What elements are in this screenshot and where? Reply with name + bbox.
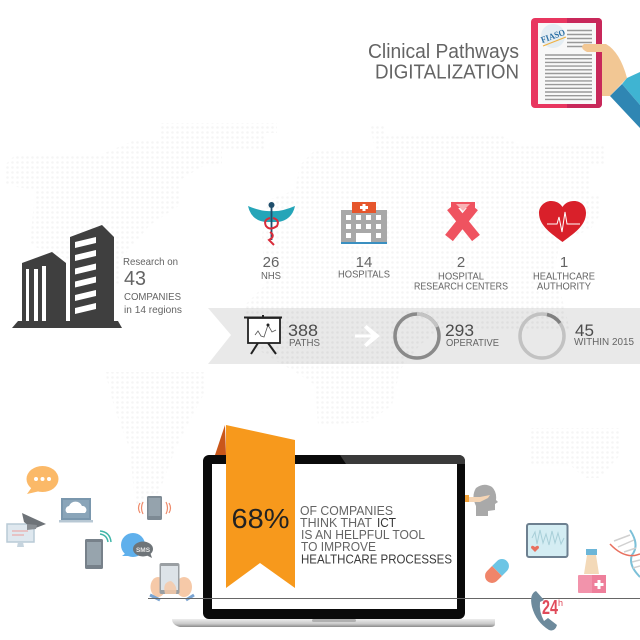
icon: SMS bubbles — [121, 533, 153, 558]
stat: 2 hospital research centers: RESEARCH CENTERS — [414, 282, 508, 292]
text: research on 43 companies: COMPANIES — [124, 291, 181, 303]
text: research on 43 companies — [123, 256, 182, 316]
icon: phone with wifi — [85, 531, 111, 569]
text: research on 43 companies: Research on — [123, 256, 178, 268]
title — [368, 41, 519, 84]
horizontal line — [148, 598, 640, 600]
icon: monitor with graduation cap — [7, 513, 46, 547]
title: Clinical Pathways — [368, 41, 519, 63]
icon: 24h phone: 24 — [542, 597, 559, 619]
stat: 14 hospitals: HOSPITALS — [338, 270, 390, 280]
stat: 2 hospital research centers: HOSPITAL — [438, 272, 484, 282]
text: ICT statement: IS AN HELPFUL TOOL — [301, 527, 425, 542]
icon: hands holding phone — [150, 563, 194, 600]
icon: heart monitor — [527, 524, 568, 557]
45 within 2015 — [574, 322, 634, 348]
293 operative: 293 — [445, 322, 474, 340]
icon: office buildings — [12, 225, 122, 328]
ring: within 2015 — [520, 314, 564, 358]
icon: medical bag with hand — [578, 549, 606, 593]
icon: vibrating phone — [138, 496, 170, 520]
stat: 2 hospital research centers: 2 — [457, 254, 465, 271]
text: ICT statement: OF COMPANIES — [300, 503, 393, 518]
text: ICT statement: HEALTHCARE PROCESSES — [301, 552, 452, 566]
icon: caduceus — [248, 202, 295, 245]
45 within 2015: WITHIN 2015 — [574, 337, 634, 348]
dotted world map background — [5, 123, 620, 505]
388 paths: 388 — [288, 322, 318, 340]
stat: 1 healthcare authority — [533, 254, 595, 292]
text: research on 43 companies: in 14 regions — [124, 304, 182, 316]
icon: SMS bubbles: SMS — [136, 547, 151, 554]
293 operative: OPERATIVE — [446, 338, 499, 349]
icon: DNA helix — [610, 530, 640, 577]
stat: 2 hospital research centers — [414, 254, 508, 292]
title: DIGITALIZATION — [375, 62, 519, 84]
text: ICT statement: ICT — [377, 515, 396, 530]
ribbon with 68 percent: 68% — [232, 503, 290, 534]
text: ICT statement: THINK THAT — [300, 515, 372, 530]
icon: tablet held by hand — [531, 18, 640, 128]
293 operative — [445, 322, 499, 349]
band: paths statistics — [208, 308, 640, 364]
stat: 26 NHS: 26 — [263, 254, 279, 271]
stat: 14 hospitals — [338, 254, 390, 280]
icon: pill — [482, 556, 512, 586]
ribbon with 68 percent — [215, 425, 295, 588]
icon: 24h phone — [531, 591, 563, 630]
388 paths: PATHS — [289, 338, 320, 349]
icon: 24h phone: h — [558, 598, 563, 608]
stat: 1 healthcare authority: AUTHORITY — [537, 282, 591, 292]
stat: 26 NHS: NHS — [261, 271, 281, 282]
arrow — [355, 325, 380, 347]
text: ICT statement: TO IMPROVE — [301, 539, 376, 554]
stat: 1 healthcare authority: HEALTHCARE — [533, 272, 595, 282]
388 paths — [288, 322, 320, 349]
stat: 26 NHS — [261, 254, 281, 282]
icon: hospital — [341, 202, 387, 244]
45 within 2015: 45 — [575, 322, 594, 340]
icon: heart — [539, 201, 586, 242]
icon: presentation easel — [244, 315, 282, 354]
text: research on 43 companies: 43 — [124, 268, 146, 290]
text: ICT statement — [300, 503, 452, 566]
stat: 1 healthcare authority: 1 — [560, 254, 568, 271]
stat: 14 hospitals: 14 — [356, 254, 372, 271]
icon: cloud laptop — [59, 498, 93, 522]
laptop — [172, 455, 495, 627]
icon: tablet held by hand: FIASO — [540, 27, 566, 45]
icon: chat bubble — [26, 466, 58, 494]
icon: ribbon — [449, 204, 476, 238]
ring: operative — [395, 314, 439, 358]
icon: head with pointing hand — [465, 485, 498, 516]
